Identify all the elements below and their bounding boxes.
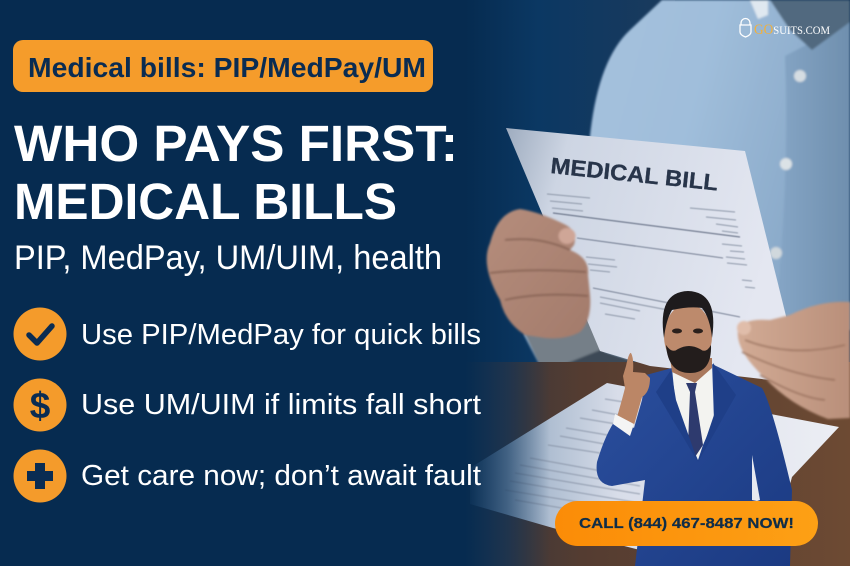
logo icon [740, 18, 751, 37]
eyes [672, 328, 682, 334]
beard [666, 345, 711, 373]
hair [663, 291, 713, 338]
logo text: GOSUITS.COM [754, 22, 830, 38]
cuff and sleeve [524, 300, 608, 366]
list item: PIP/MedPay [14, 308, 481, 360]
medical bill lines [547, 194, 755, 319]
lower document lines [505, 399, 640, 518]
white gap between arm and body [752, 455, 760, 501]
list item: UM/UIM [14, 378, 481, 432]
tag: topic badge [13, 40, 433, 92]
suit body [597, 362, 792, 566]
shirt [524, 0, 850, 372]
white shirt [672, 362, 714, 460]
title: MEDICAL BILLS [14, 173, 397, 230]
lapels [656, 363, 736, 462]
lower document on desk [470, 383, 839, 560]
icon: dollar sign [14, 378, 66, 432]
call to action button: CALL (844) 467-8487 NOW! [579, 515, 794, 532]
medical bill heading: MEDICAL BILL [549, 153, 719, 196]
title [14, 115, 458, 230]
attorney portrait [597, 291, 792, 566]
title: WHO PAYS FIRST: [14, 115, 458, 172]
tag: topic badge: Medical bills: PIP/MedPay/UM [28, 52, 426, 83]
neck [670, 358, 712, 383]
collar [744, 0, 850, 50]
call to action button [555, 501, 818, 546]
list item: get care now: Get care now; don’t await fault [81, 460, 481, 492]
icon: check mark [14, 308, 66, 360]
list item: PIP/MedPay: Use PIP/MedPay for quick bills [81, 319, 481, 351]
left hand [487, 209, 590, 338]
necktie [686, 383, 703, 457]
list item: UM/UIM: Use UM/UIM if limits fall short [81, 389, 481, 421]
list item: get care now [14, 450, 481, 502]
icon: plus sign [14, 450, 66, 502]
navy fade over desk [465, 362, 550, 566]
face [664, 304, 712, 368]
medical bill paper [506, 128, 787, 380]
right hand [737, 302, 850, 419]
raised forearm and hand [617, 353, 650, 425]
shirt placket [775, 22, 850, 330]
icon: dollar sign: $ [30, 385, 51, 426]
dark backdrop [465, 0, 675, 370]
subtitle: PIP, MedPay, UM/UIM, health [14, 239, 442, 277]
photo: man holding medical bill at desk [465, 0, 850, 566]
shirt cuff [613, 414, 634, 436]
logo: Gosuits.com [740, 18, 830, 38]
buttons [794, 70, 806, 82]
desk [465, 362, 850, 566]
